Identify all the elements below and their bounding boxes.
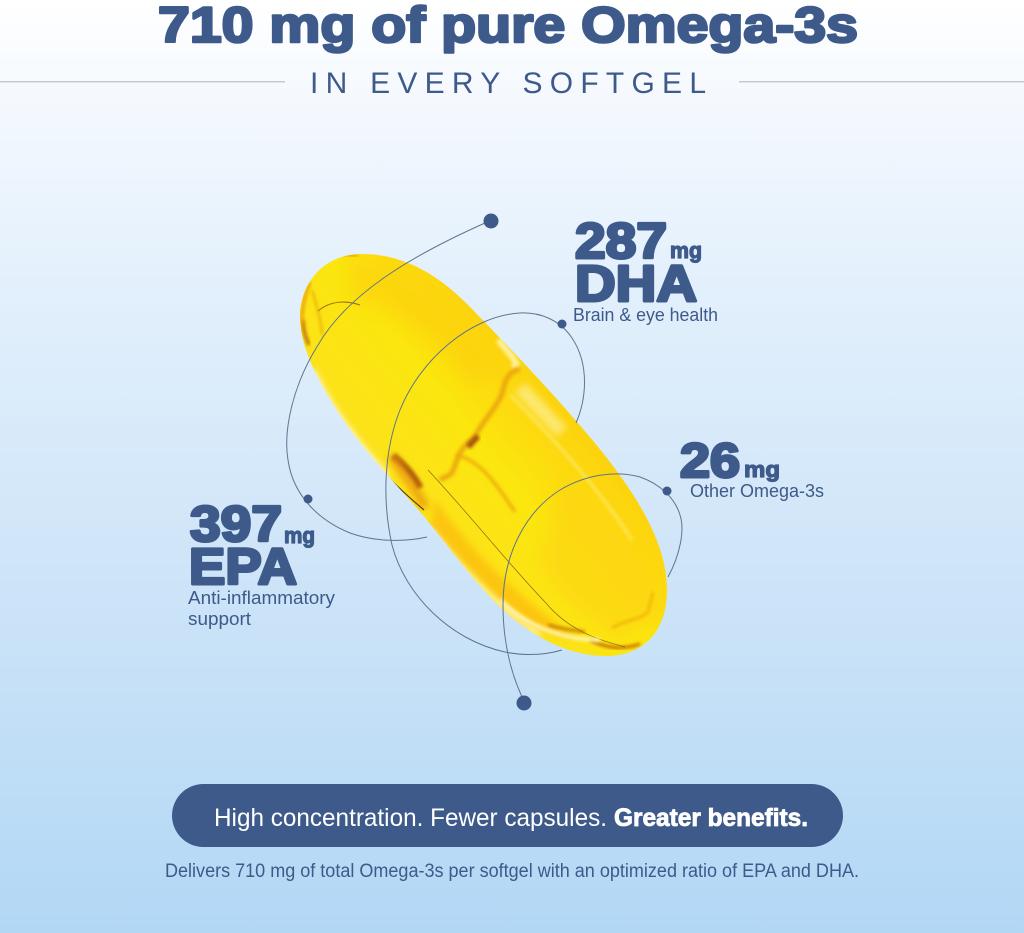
footnote: Delivers 710 mg of total Omega-3s per softgel with an optimized ratio of EPA and DHA. bbox=[165, 861, 859, 882]
label: other omega-3s bbox=[680, 435, 824, 501]
dot: other bbox=[662, 486, 672, 496]
dot: bottom large bbox=[516, 696, 532, 710]
label: EPA: mg bbox=[284, 523, 315, 548]
top end shading bbox=[303, 320, 309, 345]
label: EPA: support bbox=[188, 609, 251, 629]
callout pill bbox=[172, 784, 843, 847]
label: EPA: EPA bbox=[189, 538, 297, 595]
upper shell tint bbox=[352, 269, 431, 326]
label: EPA: 397 bbox=[190, 496, 282, 552]
orbit line: other bbox=[503, 474, 682, 697]
lower band tint bbox=[430, 500, 580, 640]
label: other omega-3s: Other Omega-3s bbox=[690, 481, 824, 501]
bottom end shading bbox=[548, 625, 585, 632]
label: DHA: 287 bbox=[575, 213, 667, 269]
label: DHA bbox=[573, 213, 718, 325]
dark seam bbox=[390, 478, 424, 510]
callout pill: High concentration. Fewer capsules. bbox=[214, 804, 607, 832]
callout pill: Greater benefits. bbox=[614, 804, 808, 832]
orbit line: EPA bbox=[287, 214, 498, 540]
dot: DHA bbox=[558, 320, 566, 328]
label: other omega-3s: mg bbox=[744, 457, 780, 482]
label: DHA: Brain & eye health bbox=[573, 305, 718, 325]
brown fold bbox=[393, 456, 420, 488]
label: other omega-3s: 26 bbox=[680, 435, 740, 488]
subtitle with rules: IN EVERY SOFTGEL bbox=[310, 67, 706, 100]
left highlight bbox=[310, 372, 385, 478]
dot: EPA small bbox=[304, 494, 312, 504]
orbit line: DHA bbox=[386, 313, 584, 654]
right side tint bbox=[546, 508, 643, 632]
softgel capsule bbox=[300, 254, 667, 656]
central orange creases bbox=[440, 369, 520, 480]
label: EPA: Anti-inflammatory bbox=[188, 588, 335, 608]
right highlights bbox=[498, 340, 517, 366]
label: EPA bbox=[188, 496, 335, 629]
thin seam bbox=[428, 470, 625, 647]
label: DHA: mg bbox=[670, 238, 702, 263]
dot: EPA large bbox=[484, 214, 498, 228]
label: DHA: DHA bbox=[575, 255, 697, 312]
